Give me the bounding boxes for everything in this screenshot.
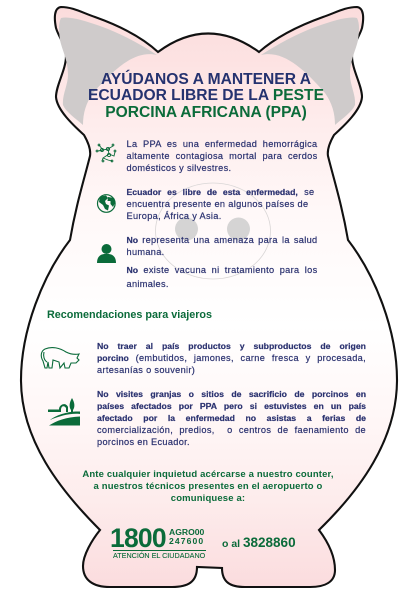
text block: Ecuador free: encuentra presente en algunos países de [126, 199, 308, 209]
contact call to action: comuniquese a: [171, 493, 245, 504]
contact call to action: Ante cualquier inquietud acércarse a nuestro counter, [82, 469, 334, 480]
text block: PPA definition: domésticos y silvestres. [126, 163, 231, 173]
text block: Ecuador free: Europa, África y Asia. [126, 211, 222, 221]
citizen attention text: ATENCIÓN EL CIUDADANO [113, 551, 205, 560]
text block: Ecuador free: Ecuador es libre de esta enfermedad, se [126, 187, 314, 197]
text block: no farm visits: comercialización, predios, o centros de faenamiento de [97, 425, 366, 435]
phone logo 1800 [110, 522, 206, 552]
text block: PPA definition [126, 139, 318, 174]
title: PORCINA AFRICANA (PPA) [105, 104, 307, 120]
text block: no human risk [126, 235, 318, 257]
text block: no vaccine: animales. [126, 279, 169, 289]
text block: no farm visits: porcinos en Ecuador. [97, 437, 190, 447]
phone letters: AGRO00 [169, 527, 204, 537]
number 1800: 1800 [110, 522, 166, 552]
text block: no products: porcino (embutidos, jamones, carne fresca y procesada, [97, 353, 366, 363]
contact call to action [82, 469, 334, 504]
text block: Ecuador free [126, 187, 314, 222]
phone letters [169, 527, 204, 546]
title [88, 70, 324, 120]
underline [113, 550, 206, 551]
title: AYÚDANOS A MANTENER A [101, 70, 311, 88]
text block: no human risk: humana. [126, 247, 165, 257]
text block: no products [97, 341, 366, 376]
text block: no farm visits: países afectados por PPA pero si estuvistes en un país [97, 401, 366, 411]
text block: PPA definition: altamente contagiosa mortal para cerdos [126, 151, 318, 161]
heading: recommendations: Recomendaciones para viajeros [47, 309, 212, 321]
phone letters: 247600 [169, 536, 204, 546]
text block: no vaccine: No existe vacuna ni tratamiento para los [126, 265, 318, 275]
text block: PPA definition: La PPA es una enfermedad hemorrágica [126, 139, 318, 149]
title: ECUADOR LIBRE DE LA PESTE [88, 87, 324, 104]
text block: no farm visits [97, 389, 366, 448]
contact call to action: a nuestros técnicos presentes en el aeropuerto o [94, 481, 322, 492]
text block: no products: artesanías o souvenir) [97, 365, 195, 375]
alternate phone number: o al 3828860 [222, 535, 296, 550]
text block: no products: No traer al país productos y subproductos de origen [97, 341, 366, 351]
text block: no human risk: No representa una amenaza para la salud [126, 235, 318, 245]
text block: no farm visits: afectado por la enfermedad no asistas a ferias de [97, 413, 366, 423]
text block: no farm visits: No visites granjas o sitios de sacrificio de porcinos en [97, 389, 366, 399]
text block: no vaccine [126, 265, 318, 289]
